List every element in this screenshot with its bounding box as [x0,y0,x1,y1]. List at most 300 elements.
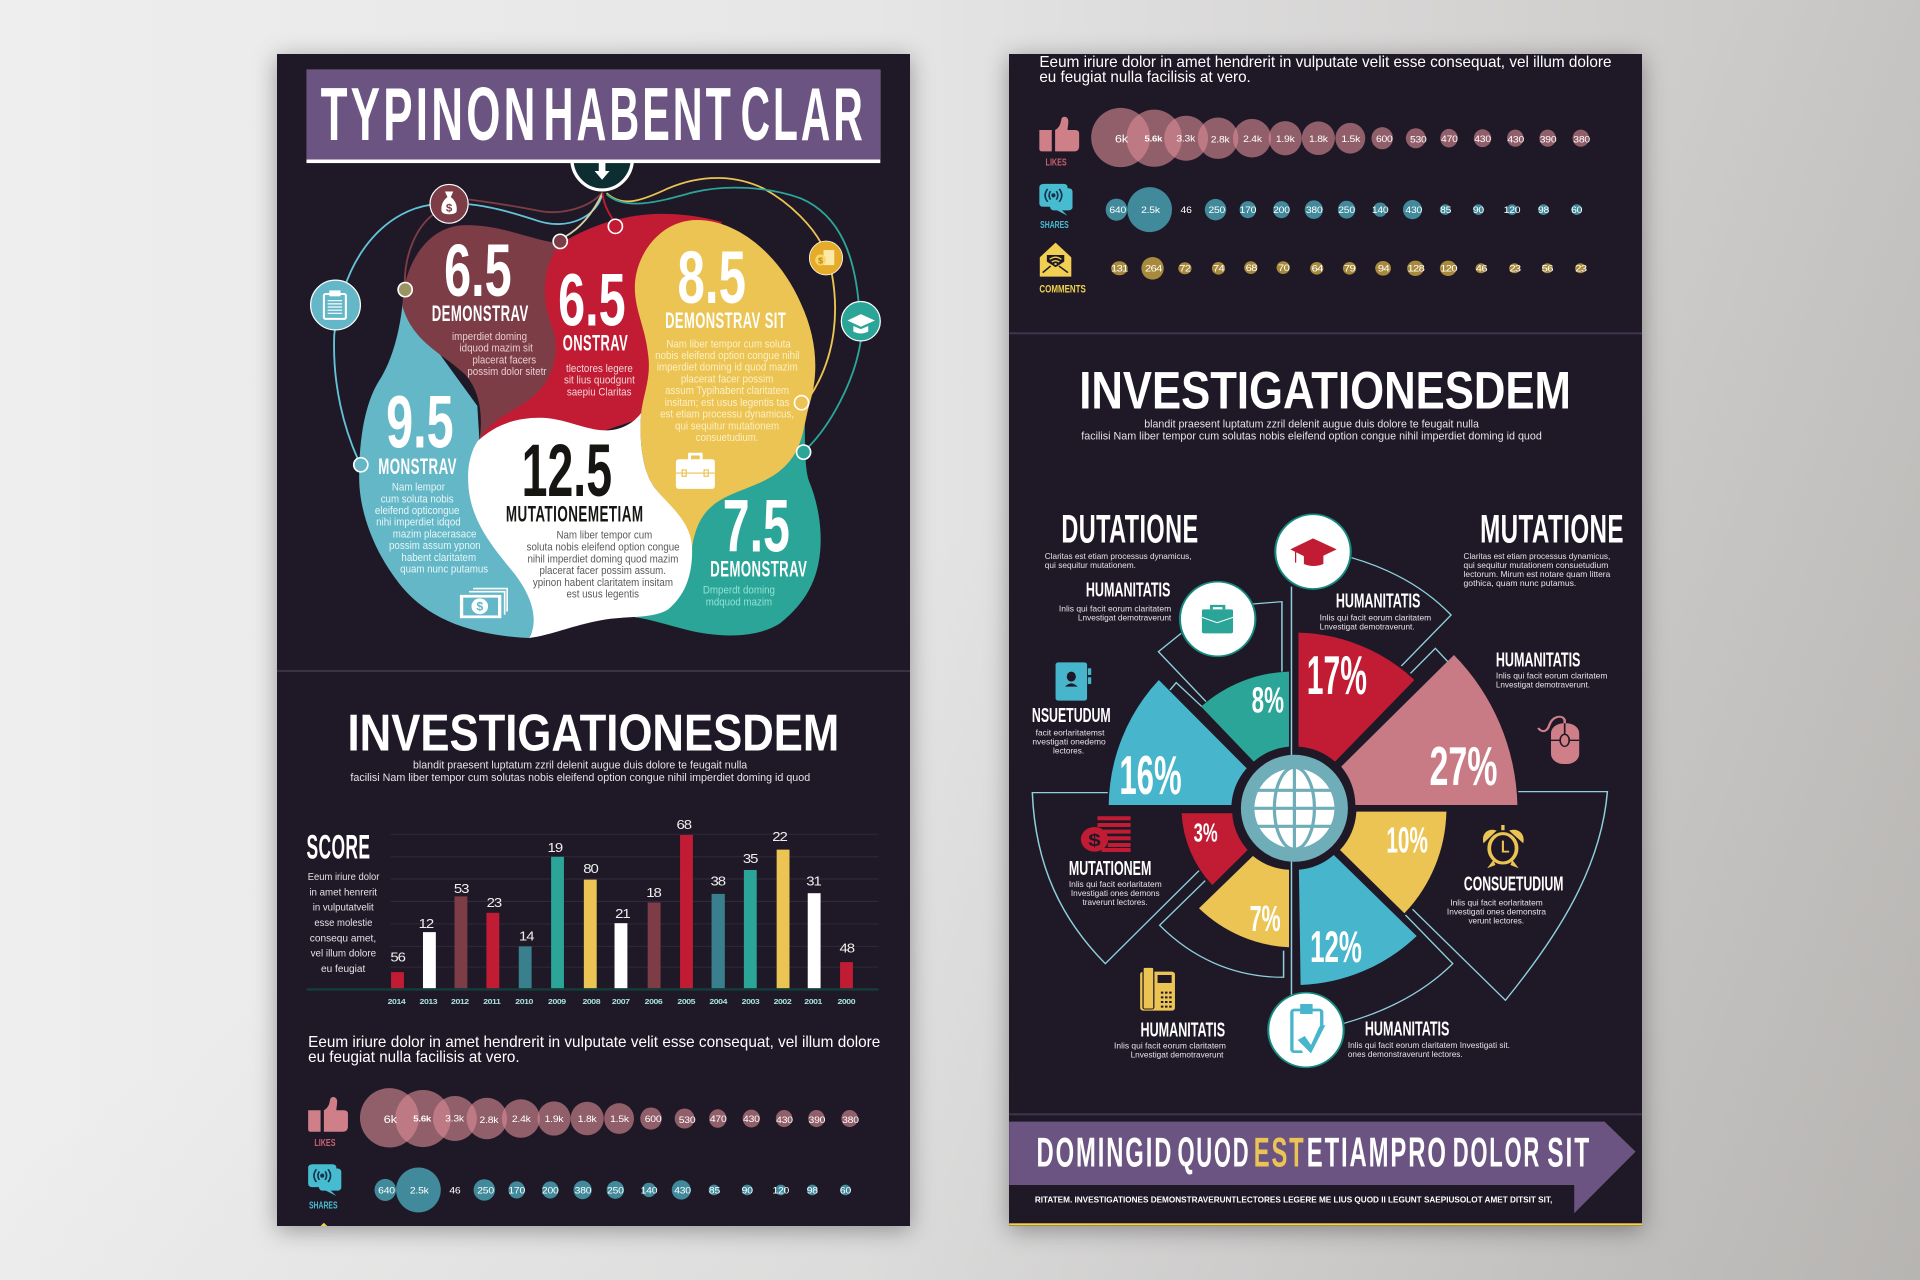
divider [1009,332,1642,334]
bar chart: 2004 [709,998,728,1006]
humanitatis: upper left [1059,579,1172,622]
comments row: 79 [1344,265,1356,274]
humanitatis: lower right: Inlis qui facit eorum claritatem Investigati sit. [1348,1041,1510,1050]
bar chart: 2014 [388,998,406,1006]
humanitatis: upper right: HUMANITATIS [1496,649,1580,671]
text block: brown 6.5 demonstrav [432,244,546,378]
footer ribbon arrow: DOLOR [1453,1129,1541,1176]
shares row: 430 [1405,206,1422,216]
text block: yellow 8.5 demonstrav sit: assum Typihabent claritatem [665,385,789,397]
heading: investigationesdem: INVESTIGATIONESDEM [348,703,839,761]
bar chart: 2010 [515,998,534,1006]
likes row: 1.5k [610,1115,629,1125]
humanitatis: lower left [1114,1019,1226,1059]
percent labels: 7% [1250,898,1281,939]
nsuetudum text [1032,704,1111,755]
comments row: 120 [1440,265,1458,274]
text block: yellow 8.5 demonstrav sit: Nam liber tempor cum soluta [666,339,792,350]
humanitatis: upper left: Lnvestigat demotraverunt [1078,613,1172,622]
connector lines [334,178,861,459]
humanitatis: lower left: Lnvestigat demotraverunt [1131,1051,1224,1059]
humanitatis: lower left: Inlis qui facit eorum claritatem [1114,1042,1226,1050]
comments row: 131 [1111,265,1129,274]
bar chart: 2007 [612,998,631,1006]
icon: money bag circle: $ [446,203,453,214]
pie chart [1109,633,1517,985]
humanitatis: upper left: Inlis qui facit eorum claritatem [1059,604,1171,613]
text block: teal 7.5 demonstrav [704,500,807,608]
blob: red 6.5 shape [479,214,722,445]
footer ribbon arrow: EST [1254,1129,1306,1176]
bar chart: 19 [548,840,563,855]
text block: white 12.5 mutationemetiam: soluta nobis eleifend option congue [527,542,680,554]
section: pie labels lower: 12% [1310,921,1362,972]
section: pie labels lower [1009,857,1642,1226]
bar chart: 2002 [774,998,792,1006]
text block: blue 9.5 monstrav [375,381,489,576]
bar chart: 14 [519,929,535,943]
shares row [1039,184,1582,232]
panel: left sheet background [277,54,910,1226]
likes row: 2.8k [480,1115,499,1126]
percent labels: 10% [1386,820,1428,861]
infographic drawing [277,56,1642,1226]
text block: teal 7.5 demonstrav: 7.5 [723,485,790,568]
likes row: 3.3k [445,1114,464,1125]
bar chart: 2001 [804,998,823,1006]
likes row: 1.9k [545,1115,564,1125]
humanitatis: upper center [1320,590,1431,631]
percent labels: 3% [1194,819,1218,848]
subheading text: facilisi Nam liber tempor cum solutas nobis eleifend option congue nihil imperdiet doming id quod [1081,430,1542,442]
panel: left column [277,70,910,1230]
subheading text: blandit praesent luptatum zzril delenit augue duis dolore te feugait nulla [413,758,747,771]
bar chart: 56 [390,950,406,965]
text block: brown 6.5 demonstrav: DEMONSTRAV [432,300,529,326]
shares row: 120 [772,1186,789,1196]
text block: yellow 8.5 demonstrav sit: qui sequitur mutationem [675,421,779,433]
humanitatis: lower right: HUMANITATIS [1365,1018,1449,1040]
likes row: 600 [645,1115,661,1125]
bar chart: 35 [743,851,759,866]
sector: 27 percent [1341,655,1517,805]
likes row: 380 [1573,135,1590,145]
shares row: 250 [1338,206,1355,216]
text block: yellow 8.5 demonstrav sit [655,237,799,444]
text block: brown 6.5 demonstrav: possim dolor sitetr [467,366,547,378]
shares row: 60 [1571,206,1582,216]
comments row: 23 [1575,265,1587,274]
text block: white 12.5 mutationemetiam: est usus legentis [566,589,639,601]
shares row: 85 [709,1186,720,1196]
footer ribbon arrow: QUOD [1177,1129,1250,1176]
score description: Eeum iriure dolor [308,872,380,883]
shares row: 140 [1372,206,1388,216]
likes row: 390 [1540,135,1556,145]
percent labels [1119,644,1498,861]
likes row: 5.6k [413,1114,431,1124]
footer ribbon arrow [1009,1122,1636,1213]
comments row: 68 [1246,264,1258,274]
likes row: 1.9k [1276,134,1295,145]
bar chart: 2012 [451,998,470,1006]
heading: investigationesdem: INVESTIGATIONESDEM [1079,361,1571,420]
text block: red 6.5 onstrav: 6.5 [558,259,626,342]
text block: red 6.5 onstrav: tlectores legere [566,363,633,375]
bubble intro text: Eeum iriure dolor in amet hendrerit in vulputate velit esse consequat, vel illum dolore [308,1033,880,1051]
text block: yellow 8.5 demonstrav sit: DEMONSTRAV SIT [665,307,786,333]
section: pie labels upper: DUTATIONE [1061,506,1199,551]
likes row: 390 [809,1115,825,1126]
footer yellow rule [1009,1223,1642,1226]
section: pie labels lower: CONSUETUDIUM [1464,873,1563,895]
divider [1009,1113,1642,1115]
comments row: 70 [1278,264,1290,274]
icon: coin document circle [809,241,843,275]
comments row: 23 [1509,265,1522,274]
likes row: 2.8k [1211,135,1230,145]
icon: clipboard circle [311,280,360,330]
text block: yellow 8.5 demonstrav sit: imperdiet doming id quod mazim [657,362,798,374]
footer ribbon arrow: ETIAMPRO [1307,1129,1448,1176]
score description [308,872,380,975]
mutatione heading: qui sequitur mutationem consuetudium [1464,561,1608,570]
title banner: TYPINON [321,73,539,157]
bar chart: 22 [772,829,788,844]
bar chart: 68 [677,817,692,832]
icon: contact book [1056,662,1091,701]
bar chart: 12 [419,916,434,931]
comments row: 264 [1145,265,1163,274]
text block: white 12.5 mutationemetiam: MUTATIONEMETIAM [506,501,644,527]
likes row: 600 [1376,134,1393,145]
likes row: 430 [1507,135,1524,145]
text block: red 6.5 onstrav: ONSTRAV [563,330,628,355]
text block: yellow 8.5 demonstrav sit: consuetudium. [696,432,758,444]
bar chart: 2003 [742,998,760,1006]
humanitatis: upper center: Lnvestigat demotraverunt. [1320,622,1415,631]
text block: brown 6.5 demonstrav: 6.5 [444,230,512,313]
likes row: 530 [679,1115,695,1126]
subheading text [350,758,810,784]
humanitatis: lower left: HUMANITATIS [1141,1019,1225,1041]
bubble intro text [308,1033,880,1066]
text block: white 12.5 mutationemetiam: Nam liber tempor cum [556,530,652,542]
icon: globe [1241,755,1348,862]
bar chart: 80 [583,861,599,876]
icon: briefcase circle [1180,582,1255,656]
title banner [306,70,880,163]
likes row: LIKES [314,1138,336,1149]
section: pie labels upper [1032,506,1624,868]
likes row: 1.8k [1309,134,1328,145]
text block: blue 9.5 monstrav: MONSTRAV [378,453,457,479]
text block: yellow 8.5 demonstrav sit: est etiam processu dynamicus, [660,409,794,421]
footer ribbon arrow: SIT [1547,1129,1591,1176]
blob: white 12.5 shape [468,413,692,638]
mutationem text: Investigati ones demons [1071,889,1160,898]
likes row [1039,108,1590,168]
humanitatis: upper center: Inlis qui facit eorum claritatem [1320,613,1431,622]
shares row: 140 [641,1186,657,1196]
shares row: 250 [607,1186,624,1196]
bar chart: 2009 [548,998,567,1006]
icon: graduation cap circle [1275,514,1351,589]
text block: blue 9.5 monstrav: mazim placerasace [393,529,476,540]
blob: brown 6.5 shape [403,225,560,441]
shares row: 380 [1306,206,1323,216]
text block: white 12.5 mutationemetiam: nihil imperdiet doming quod mazim [527,554,678,565]
comments row: 94 [1378,265,1390,274]
percent labels: 8% [1252,680,1284,721]
shares row: 380 [575,1186,591,1196]
consuetudium text: Inlis qui facit eorlaritatem [1450,899,1543,907]
shares row: 98 [807,1186,818,1196]
likes row: 1.5k [1341,134,1360,145]
section: bar chart block: SCORE [306,827,370,866]
text block: teal 7.5 demonstrav: DEMONSTRAV [710,556,807,582]
mutatione heading: Claritas est etiam processus dynamicus, [1464,552,1610,561]
text block: brown 6.5 demonstrav: imperdiet doming [452,331,527,343]
shares row: 640 [1109,206,1126,216]
bar chart: 2005 [677,998,696,1006]
likes row: 470 [710,1115,727,1125]
sector: 12 percent [1299,855,1417,985]
shares row: 250 [477,1186,494,1196]
bar chart: 53 [454,881,470,896]
blob: yellow 8.5 shape [635,220,815,547]
text block: teal 7.5 demonstrav: Dmperdt doming [703,585,775,597]
bar chart: 2013 [420,998,438,1006]
bar chart: 18 [646,885,662,900]
bubble intro text: eu feugiat nulla facilisis at vero. [308,1048,520,1066]
blob diagram [306,70,880,638]
shares row: SHARES [309,1200,338,1211]
shares row: 2.5k [410,1186,429,1196]
subheading text: blandit praesent luptatum zzril delenit augue duis dolore te feugait nulla [1144,418,1479,430]
nsuetudum text: lectores. [1053,746,1084,755]
section: social bubbles [1039,53,1611,232]
score description: vel illum dolore [311,948,376,960]
mutationem text [1069,857,1162,907]
text block: white 12.5 mutationemetiam: placerat facer possim assum. [539,565,666,577]
blob: teal 7.5 shape [635,418,821,635]
dutatione heading [1045,506,1199,570]
text block: teal 7.5 demonstrav: mdquod mazim [706,597,772,608]
bar chart: 21 [615,906,631,921]
section: bar chart block [306,703,880,1230]
comments row: 46 [1476,265,1488,274]
icon: money bag circle [430,184,468,223]
text block: yellow 8.5 demonstrav sit: insitam; est usus legentis tas [665,397,790,409]
likes row: 6k [1115,132,1129,145]
bar chart: 2011 [483,998,501,1006]
sector: 3 percent [1182,813,1248,885]
text block: white 12.5 mutationemetiam [506,430,680,601]
text block: yellow 8.5 demonstrav sit: 8.5 [678,237,746,320]
section: comments and heading [1009,243,1642,442]
shares row: 200 [542,1186,559,1196]
divider left [277,670,910,672]
subheading text [1081,418,1542,442]
shares row: 85 [1440,206,1451,216]
likes row: 6k [384,1113,398,1126]
mutatione heading: gothica, quam nunc putamus. [1464,579,1576,588]
shares row: 98 [1538,206,1549,216]
likes row: 430 [776,1115,793,1126]
humanitatis: upper right: Lnvestigat demotraverunt. [1496,680,1590,689]
bubble intro text: Eeum iriure dolor in amet hendrerit in vulputate velit esse consequat, vel illum dolore [1039,53,1611,70]
score description: in vulputatvelit [313,902,374,913]
comments row: 72 [1179,265,1192,274]
text block: blue 9.5 monstrav: 9.5 [386,381,454,464]
icon: computer mouse [1538,717,1579,764]
score description: consequ amet, [310,933,376,944]
icon: coin document circle: $ [818,256,823,265]
nsuetudum text: nvestigati onedemo [1032,737,1106,746]
comments row: 128 [1407,265,1425,274]
icon: coin stack [1081,818,1131,852]
text block: blue 9.5 monstrav: Nam lempor [392,482,445,493]
text block: brown 6.5 demonstrav: idquod mazim sit [459,343,533,355]
comments row [1039,243,1587,295]
likes row: 1.8k [578,1115,597,1125]
comments row: 74 [1213,265,1225,274]
comments row: COMMENTS [1039,282,1086,295]
percent labels [1250,898,1362,972]
icon: arrow circle [570,163,634,192]
shares row: SHARES [1040,220,1069,231]
text block: white 12.5 mutationemetiam: 12.5 [522,430,612,513]
text block: brown 6.5 demonstrav: placerat facers [472,355,537,366]
likes row: 380 [842,1115,859,1126]
connector nodes [354,219,811,472]
bar chart: 2000 [837,998,856,1006]
text block: blue 9.5 monstrav: cum soluta nobis [381,494,454,505]
icon: alarm clock [1483,825,1524,868]
text block: white 12.5 mutationemetiam: ypinon habent claritatem insitam [533,577,673,589]
text block: yellow 8.5 demonstrav sit: nobis eleifend option congue nihil [655,350,799,362]
humanitatis: upper left: HUMANITATIS [1086,579,1170,601]
likes row: 2.4k [512,1115,531,1125]
icon: graduation cap circle [841,301,880,341]
mutationem text: MUTATIONEM [1069,857,1151,879]
likes row: 530 [1410,135,1427,145]
section: pie labels upper: NSUETUDUM [1032,704,1111,726]
shares row: 2.5k [1141,206,1160,216]
shares row: 640 [378,1186,395,1196]
likes row: 430 [1474,134,1491,145]
likes row [308,1088,859,1149]
panel: right column [1009,53,1642,1226]
shares row: 60 [840,1186,851,1196]
text block: blue 9.5 monstrav: eleifend opticongue [375,505,459,517]
likes row: 5.6k [1145,134,1162,143]
bubble intro text [1039,53,1611,85]
shares row: 46 [1181,206,1192,216]
bar chart: 48 [839,940,855,955]
bubble intro text: eu feugiat nulla facilisis at vero. [1039,68,1251,85]
consuetudium text: verunt lectores. [1468,917,1524,925]
icon: coin stack: $ [1088,831,1101,850]
likes row: 430 [743,1115,760,1125]
footer ribbon arrow: DOMINGID [1036,1129,1173,1176]
consuetudium text [1447,873,1563,925]
text block: blue 9.5 monstrav: habent claritatem [401,552,476,564]
mutationem text: Inlis qui facit eorlaritatem [1069,880,1162,889]
mutatione heading: lectorum. Mirum est notare quam littera [1464,570,1611,579]
bar chart: 38 [711,873,726,888]
shares row: 90 [742,1186,753,1196]
title banner: CLAR [741,73,866,157]
humanitatis: upper right [1496,649,1607,689]
icon: briefcase [676,454,715,489]
shares row: 90 [1473,206,1484,216]
text block: red 6.5 onstrav [560,274,635,398]
shares row: 46 [449,1186,460,1196]
comments row: 64 [1312,265,1324,274]
shares row: 430 [674,1186,691,1196]
icon: clipboard check circle [1268,993,1344,1067]
humanitatis: lower right [1348,1018,1510,1059]
likes row: 2.4k [1243,134,1262,145]
shares row [308,1164,851,1212]
text block: blue 9.5 monstrav: possim assum ypnon [389,540,481,552]
comments row: 56 [1542,265,1554,274]
section: pie labels upper: 27% [1430,736,1498,797]
bar chart: 2008 [582,998,601,1006]
percent labels: 17% [1307,644,1367,705]
bar chart [306,817,879,1006]
icon: telephone [1140,967,1175,1011]
panel: right sheet background [1009,54,1642,1226]
bar chart: 31 [806,874,822,888]
sector: 17 percent [1298,633,1414,762]
sector: 10 percent [1340,812,1446,913]
likes row: 470 [1441,134,1458,145]
footer subtitle: RITATEM. INVESTIGATIONES DEMONSTRAVERUNTLECTORES LEGERE ME LIUS QUOD II LEGUNT SAEPIUSOLOT AMET DITSIT SIT, [1035,1194,1552,1204]
shares row: 250 [1208,206,1225,216]
score description: in amet henrerit [309,887,378,898]
title banner: HABENT [544,73,734,157]
panel: right column: MUTATIONE [1480,506,1624,551]
sector: 16 percent [1109,680,1247,805]
icon: banknotes [460,589,507,618]
score description: eu feugiat [321,964,366,975]
text block: blue 9.5 monstrav: nihi imperdiet idqod [376,517,461,529]
shares row: 170 [508,1186,525,1196]
bar chart: 23 [487,895,502,910]
likes row: LIKES [1046,157,1067,168]
nsuetudum text: facit eorlaritatemst [1036,728,1105,737]
dutatione heading: Claritas est etiam processus dynamicus, [1045,552,1192,561]
humanitatis: upper center: HUMANITATIS [1336,590,1420,612]
sector: 7 percent [1199,856,1289,947]
score description: esse molestie [314,918,372,929]
shares row: 120 [1504,206,1520,216]
icon: comments envelope tip [320,1222,328,1226]
bar chart: 2006 [645,998,663,1006]
shares row: 170 [1240,206,1256,216]
percent labels: 16% [1119,744,1182,805]
text block: red 6.5 onstrav: sit lius quodgunt [564,375,635,387]
consuetudium text: Investigati ones demonstra [1447,908,1547,916]
shares row: 200 [1273,206,1290,216]
dutatione heading: qui sequitur mutationem. [1045,561,1136,570]
likes row: 3.3k [1176,134,1195,144]
icon: banknotes: $ [476,600,483,613]
sector: 8 percent [1201,672,1289,762]
